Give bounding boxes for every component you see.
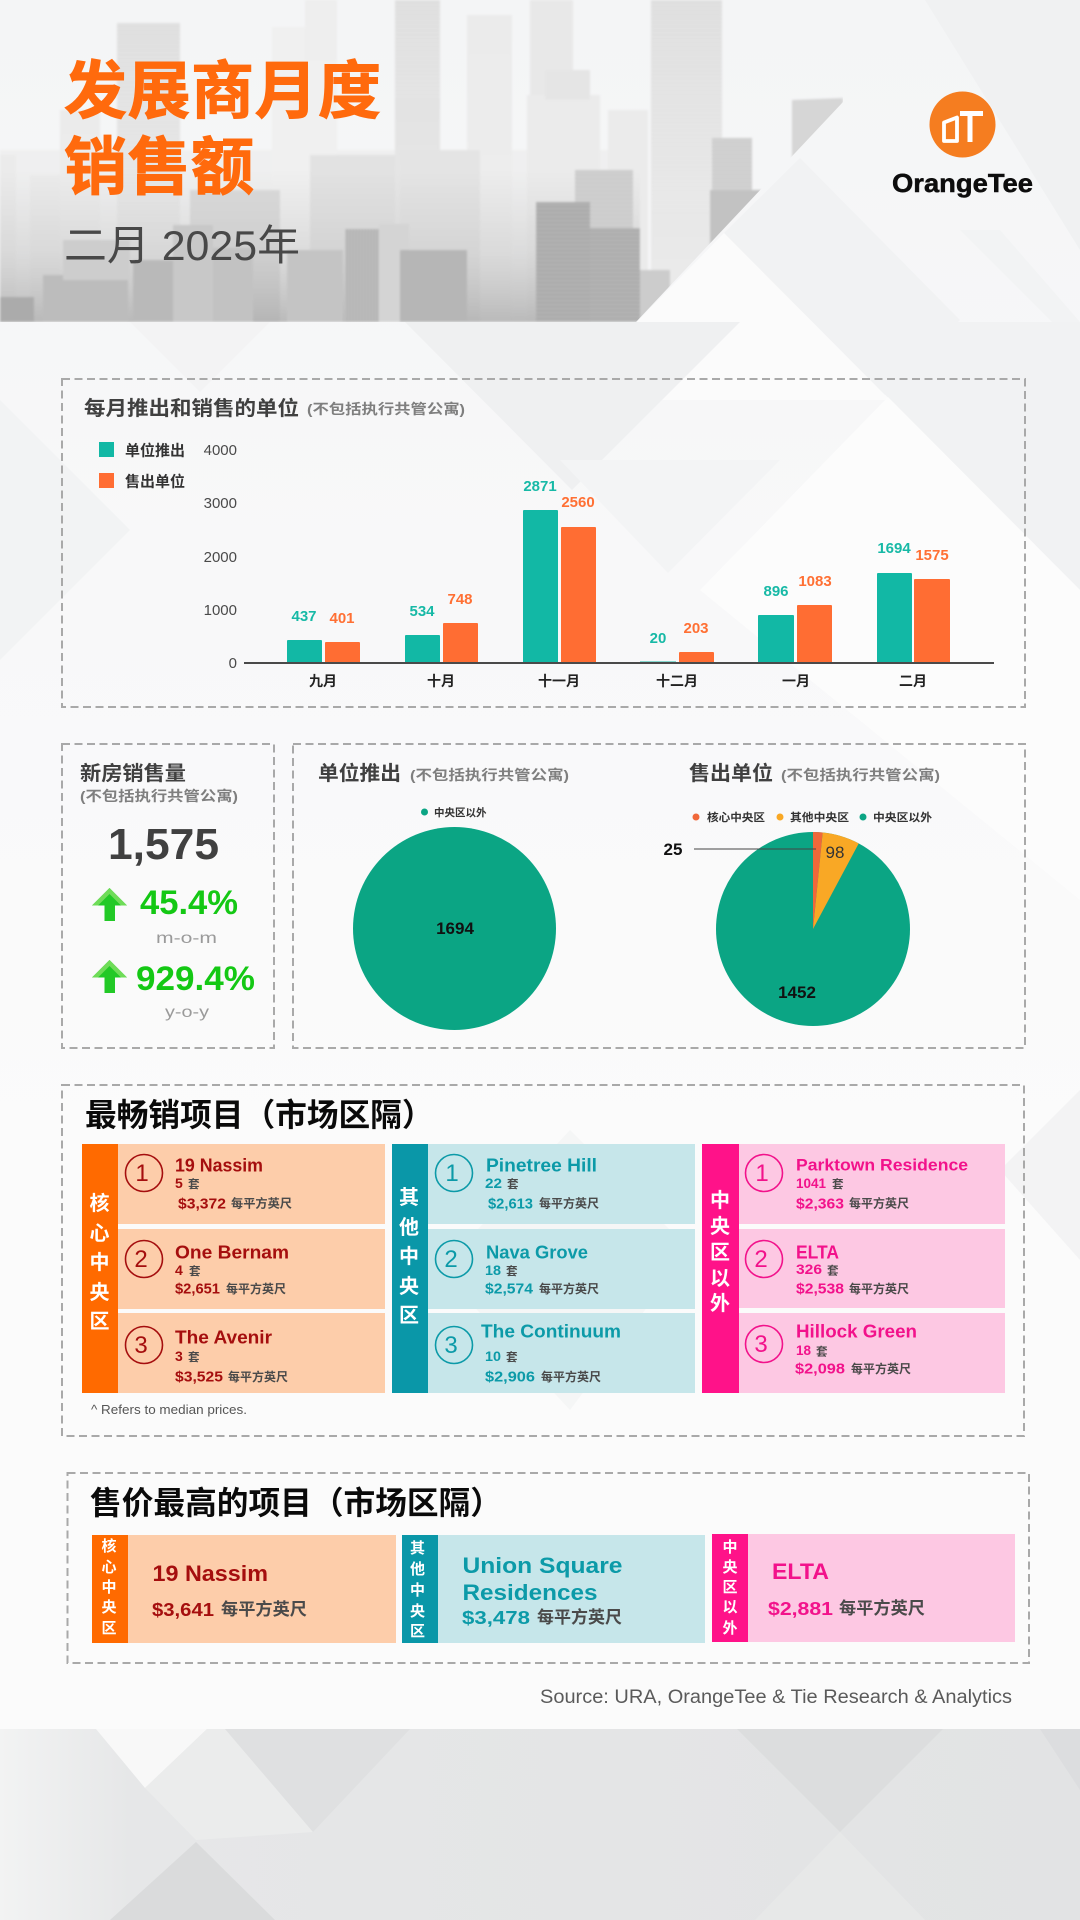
panel heading (84, 396, 465, 420)
heading: 最畅销项目（市场区隔） (85, 1097, 434, 1133)
pie legend: sold (692, 810, 932, 824)
project: 19 Nassim: 5 (175, 1175, 183, 1191)
legend (99, 442, 185, 490)
segment label: 央 (90, 1281, 110, 1304)
pie heading: sold (689, 761, 940, 785)
bar chart: 437 (291, 608, 317, 625)
bar chart: 203 (683, 620, 709, 637)
project: Pinetree Hill: 套 (507, 1177, 519, 1191)
project: Nava Grove (436, 1240, 599, 1298)
bar chart: 1575 (915, 547, 949, 564)
y axis labels: 2000 (204, 549, 237, 566)
KPI heading: (不包括执行共管公寓) (80, 788, 238, 804)
project: Union Square Residences (462, 1553, 622, 1628)
project: ELTA: 每平方英尺 (839, 1598, 925, 1618)
project: The Continuum (436, 1322, 621, 1386)
project: Nava Grove: Nava Grove (486, 1242, 588, 1262)
project: One Bernam: 2 (134, 1246, 148, 1273)
segment label: 中 (710, 1189, 730, 1212)
project: Pinetree Hill: 每平方英尺 (539, 1196, 599, 1210)
title: 发展商月度 (64, 57, 382, 127)
pie chart: sold units: 25 (664, 840, 682, 859)
panel heading: (不包括执行共管公寓) (307, 401, 465, 417)
project: ELTA: 326 (796, 1261, 822, 1277)
bar chart: 2560 (561, 494, 595, 511)
project: Parktown Residence: 每平方英尺 (849, 1196, 909, 1210)
project: Union Square Residences: Union Square (462, 1553, 622, 1578)
project: The Avenir: The Avenir (175, 1328, 272, 1348)
project: Parktown Residence: $2,363 (796, 1196, 844, 1212)
project: Parktown Residence: 套 (832, 1177, 844, 1191)
pie heading: sold: 售出单位 (689, 761, 773, 785)
segment label (722, 1539, 738, 1637)
project: One Bernam: One Bernam (175, 1242, 289, 1262)
legend: 售出单位 (125, 472, 185, 490)
segment label: 核 (90, 1191, 110, 1215)
segment label: 以 (722, 1599, 738, 1616)
segment label (399, 1186, 419, 1327)
project: One Bernam (126, 1240, 289, 1298)
project: Parktown Residence (746, 1154, 968, 1212)
project: The Continuum: $2,906 (485, 1368, 535, 1386)
project: The Continuum: 10 (485, 1348, 501, 1364)
y axis labels: 0 (229, 655, 237, 672)
subtitle: date: 二月 2025年 (64, 222, 300, 269)
KPI heading: 新房销售量 (80, 762, 186, 785)
pie heading: launched: 单位推出 (318, 761, 401, 785)
stat: month on month change: 45.4% (140, 884, 238, 922)
stat: month on month change: m-o-m (156, 930, 217, 947)
legend: 单位推出 (125, 442, 185, 460)
column: RCR (392, 1144, 695, 1393)
project: The Continuum: The Continuum (481, 1322, 621, 1342)
project: 19 Nassim: 1 (135, 1160, 149, 1187)
column: OCR (702, 1144, 1005, 1393)
segment label (90, 1191, 110, 1333)
pie chart: sold units: 98 (826, 843, 844, 862)
bar chart: 748 (447, 591, 473, 608)
bar chart: 2871 (523, 478, 557, 495)
project: 19 Nassim: 每平方英尺 (221, 1599, 307, 1619)
project: Nava Grove: 2 (444, 1246, 458, 1273)
icon: up arrow month on month (92, 888, 127, 921)
y axis labels: 4000 (204, 442, 237, 459)
heading: 售价最高的项目（市场区隔） (90, 1485, 502, 1521)
project: 19 Nassim (152, 1561, 307, 1620)
project: ELTA: $2,881 (768, 1599, 833, 1619)
project: ELTA: $2,538 (796, 1280, 844, 1298)
project: Hillock Green: Hillock Green (796, 1322, 917, 1342)
segment label: 央 (399, 1275, 419, 1298)
project: Parktown Residence: Parktown Residence (796, 1156, 968, 1174)
segment label: 中 (410, 1582, 425, 1599)
project: One Bernam: 每平方英尺 (226, 1281, 286, 1296)
project: Nava Grove: 套 (506, 1264, 518, 1278)
bar chart: 401 (329, 610, 355, 627)
segment label: 其 (399, 1186, 419, 1209)
pie chart: launched units: 1694 (436, 919, 474, 938)
segment label: 外 (722, 1619, 738, 1637)
project: Nava Grove: $2,574 (485, 1280, 534, 1298)
KPI value: 1,575 (108, 820, 219, 869)
project: Hillock Green: 18 (796, 1342, 811, 1358)
project: ELTA (768, 1559, 925, 1619)
stat: year on year change: y-o-y (165, 1004, 209, 1021)
project: The Avenir: 3 (134, 1332, 148, 1359)
pie chart: sold units (664, 832, 910, 1026)
bar chart: 1083 (798, 573, 832, 590)
segment label: 区 (722, 1579, 738, 1596)
project: The Continuum: 每平方英尺 (541, 1369, 601, 1384)
panel: new home sales KPI (62, 744, 274, 1048)
project: 19 Nassim: 19 Nassim (175, 1156, 263, 1176)
logo: OrangeTee (892, 92, 1033, 198)
project: The Continuum: 3 (444, 1332, 458, 1359)
segment label: 区 (410, 1623, 425, 1640)
column: CCR (82, 1144, 385, 1393)
project: Pinetree Hill: 1 (445, 1160, 459, 1187)
project: Parktown Residence: 1041 (796, 1175, 826, 1191)
project: ELTA (746, 1240, 909, 1298)
segment label: 区 (90, 1311, 110, 1333)
project: ELTA: 每平方英尺 (849, 1281, 909, 1296)
pie heading: launched: (不包括执行共管公寓) (410, 767, 569, 783)
pie chart: sold units: 1452 (778, 983, 816, 1002)
segment label: 区 (101, 1620, 117, 1637)
segment label: 核 (101, 1537, 117, 1555)
segment label (101, 1537, 117, 1637)
bar chart: 20 (650, 630, 666, 647)
segment label (410, 1539, 425, 1640)
card: RCR (402, 1535, 705, 1643)
segment label: 外 (710, 1292, 730, 1315)
bar chart: 九月 (309, 673, 337, 689)
project: 19 Nassim: 套 (188, 1177, 200, 1191)
segment label: 央 (722, 1559, 738, 1576)
project: The Avenir: 3 (175, 1348, 183, 1364)
stat: year on year change: 929.4% (136, 960, 255, 998)
project: The Continuum: 套 (506, 1350, 518, 1364)
project: 19 Nassim: 19 Nassim (152, 1561, 268, 1586)
bar chart: 十一月 (538, 673, 580, 689)
pie legend: sold: 其他中央区 (790, 810, 849, 824)
project: Nava Grove: 每平方英尺 (539, 1281, 599, 1296)
pie legend: launched: 中央区以外 (434, 806, 487, 819)
project: One Bernam: 套 (189, 1264, 201, 1278)
pie legend: sold: 中央区以外 (873, 810, 932, 824)
project: Union Square Residences: $3,478 (462, 1608, 530, 1628)
project: Pinetree Hill: $2,613 (488, 1196, 533, 1212)
card: OCR (712, 1534, 1015, 1642)
bar chart: 十二月 (656, 673, 698, 689)
project: Hillock Green: 套 (816, 1344, 828, 1358)
bar chart: 一月 (782, 673, 810, 689)
segment label: 区 (399, 1305, 419, 1327)
segment label: 区 (710, 1242, 730, 1264)
header: city skyline image (0, 0, 843, 322)
project: 19 Nassim (126, 1154, 292, 1212)
project: ELTA: 套 (827, 1264, 839, 1278)
y axis labels: 3000 (204, 495, 237, 512)
pie heading: sold: (不包括执行共管公寓) (781, 767, 940, 783)
segment label: 中 (722, 1539, 738, 1556)
icon: up arrow year on year (92, 960, 127, 993)
project: Parktown Residence: 1 (755, 1160, 769, 1187)
segment label: 心 (90, 1222, 110, 1245)
segment label: 中 (101, 1579, 117, 1596)
segment label: 中 (399, 1245, 419, 1268)
project: Union Square Residences: Residences (462, 1580, 598, 1605)
panel: highest priced projects by market segment (68, 1473, 1029, 1663)
panel: monthly launched and sold units (62, 379, 1025, 707)
project: Hillock Green: $2,098 (795, 1360, 845, 1378)
pie legend: sold: 核心中央区 (707, 810, 765, 824)
project: Pinetree Hill: Pinetree Hill (486, 1156, 597, 1176)
segment label: 他 (399, 1216, 419, 1239)
segment label: 央 (710, 1215, 730, 1238)
project: The Avenir: 套 (188, 1350, 200, 1364)
logo: OrangeTee: OrangeTee (892, 168, 1033, 198)
bar chart: 896 (763, 583, 789, 600)
project: 19 Nassim: 每平方英尺 (231, 1196, 292, 1210)
title (64, 57, 382, 203)
project: Pinetree Hill (436, 1154, 599, 1212)
project: ELTA: ELTA (796, 1242, 839, 1262)
bar chart: 534 (409, 603, 435, 620)
segment label (710, 1189, 730, 1315)
source note: Source: URA, OrangeTee & Tie Research & Analytics (540, 1687, 1012, 1708)
segment label: 他 (410, 1561, 425, 1578)
project: ELTA: 2 (754, 1246, 768, 1273)
project: Hillock Green: 每平方英尺 (851, 1361, 911, 1376)
y axis labels (204, 442, 237, 672)
segment label: 心 (101, 1559, 117, 1576)
bar chart: 二月 (899, 673, 927, 689)
segment label: 央 (101, 1599, 117, 1616)
project: The Avenir (126, 1326, 288, 1386)
project: Pinetree Hill: 22 (485, 1175, 502, 1191)
stat: month on month change (140, 884, 238, 947)
panel heading: 每月推出和销售的单位 (84, 396, 299, 420)
project: The Avenir: 每平方英尺 (228, 1369, 288, 1384)
project: 19 Nassim: $3,641 (152, 1600, 214, 1620)
bar chart (244, 478, 994, 689)
project: Hillock Green: 3 (754, 1331, 768, 1358)
y axis labels: 1000 (204, 602, 237, 619)
bar chart: 1694 (877, 540, 911, 557)
stat: year on year change (136, 960, 255, 1021)
project: Union Square Residences: 每平方英尺 (537, 1607, 622, 1627)
segment label: 央 (410, 1603, 425, 1620)
project: Hillock Green (746, 1322, 917, 1378)
project: One Bernam: 4 (175, 1262, 183, 1278)
pie chart: launched units (353, 827, 556, 1030)
card: CCR (92, 1535, 396, 1643)
project: Nava Grove: 18 (485, 1262, 501, 1278)
pie heading: launched (318, 761, 569, 785)
project: The Avenir: $3,525 (175, 1368, 223, 1386)
panel: best selling projects by market segment (62, 1085, 1024, 1436)
KPI heading (80, 762, 238, 804)
project: ELTA: ELTA (772, 1559, 829, 1584)
panel: pie charts (293, 744, 1025, 1048)
bar chart: 十月 (427, 673, 455, 689)
segment label: 中 (90, 1251, 110, 1274)
project: 19 Nassim: $3,372 (178, 1196, 226, 1212)
segment label: 其 (410, 1539, 425, 1557)
title: 销售额 (64, 133, 254, 203)
segment label: 以 (710, 1268, 730, 1290)
footnote: ^ Refers to median prices. (91, 1403, 247, 1417)
project: One Bernam: $2,651 (175, 1280, 220, 1298)
